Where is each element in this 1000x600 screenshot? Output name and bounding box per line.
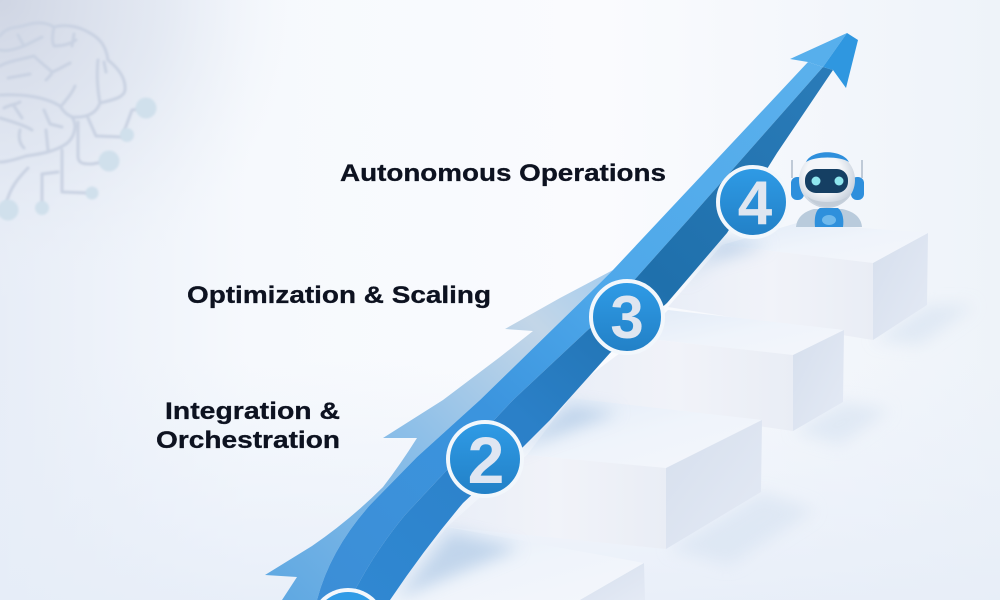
heading: Integration & Orchestration: Orchestration [156,427,340,454]
heading: Autonomous Operations: Autonomous Operations [340,160,666,187]
badge 2: 2 [468,423,504,497]
badge 3: 3 [610,284,644,351]
badge 4 [718,167,788,238]
step 3 [560,310,844,431]
stair shadows under arrow [395,238,770,600]
robot body [796,209,862,227]
arrow rising to the upper right [265,33,858,600]
badge 4: 4 [738,169,773,238]
robot antennae [792,160,862,178]
robot visor [805,169,848,193]
arrow dark face [350,67,833,600]
heading: Integration & Orchestration [156,398,340,454]
arrow bright face [317,62,823,600]
step 2 [447,398,762,549]
heading: Optimization & Scaling: Optimization & Scaling [187,282,491,309]
step 4 [668,223,928,340]
badge 2 [448,422,522,497]
icon: brain circuit nodes [0,98,156,220]
arrow head side [823,33,858,88]
step shadows [668,305,975,565]
robot helmet [799,152,855,208]
badge 3 [591,281,663,353]
heading: Integration & Orchestration: Integration & [165,398,340,425]
step 1 [390,527,645,600]
steps staircase [390,223,975,600]
icon: brain circuit watermark [0,23,146,205]
icon: robot [791,152,864,227]
arrow pale outer fin [265,270,613,600]
arrow head top [790,33,847,67]
robot ear muffs [791,177,804,200]
badge 1 [320,588,376,600]
